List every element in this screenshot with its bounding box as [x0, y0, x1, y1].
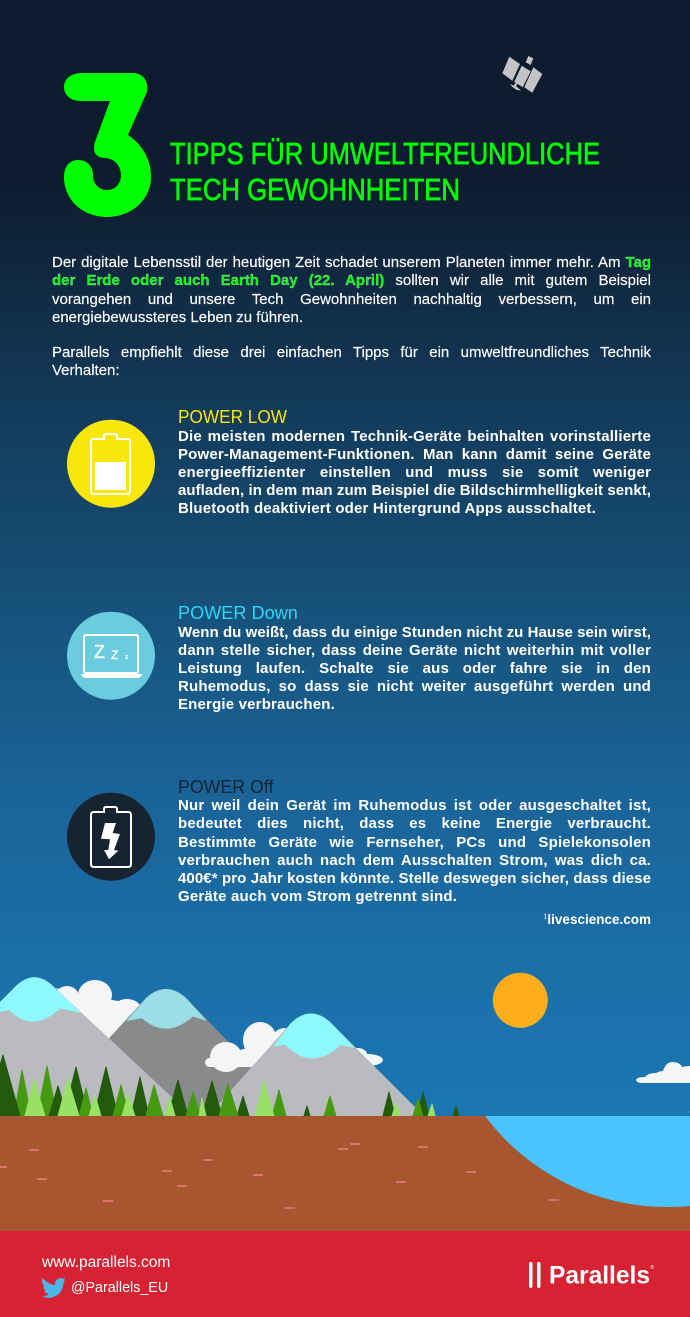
panel: power off [178, 776, 651, 927]
Parallels logo: ® [650, 1264, 654, 1271]
footer twitter handle: @Parallels_EU [71, 1280, 168, 1296]
text: power off: Bestimmte Geräte wie Fernseher, PCs und Spielekonsolen [178, 834, 651, 851]
text: power low: Die meisten modernen Technik-Geräte beinhalten vorinstallierte [178, 428, 651, 445]
icon: sun [493, 973, 548, 1028]
panel: power down [178, 602, 651, 713]
text: power off: verbrauchen auch nach dem Ausschalten Strom, was dich ca. [178, 852, 651, 869]
heading: power low: POWER LOW [178, 406, 287, 427]
icon: power down laptop: Z [94, 642, 105, 662]
intro text: energiebewussteres Leben zu führen. [52, 309, 303, 326]
horizon dots [465, 1111, 690, 1113]
numeral 3 [64, 73, 151, 217]
title [170, 137, 600, 207]
cloud right [636, 1062, 690, 1083]
text: power low: energieeffizienter einstellen und muss sie somit weniger [178, 464, 651, 481]
ground [0, 1116, 690, 1231]
heading: power down: POWER Down [178, 602, 298, 623]
sea [485, 1116, 690, 1207]
cloud in front of dark mountain [205, 1022, 383, 1072]
mountain: left light gray [0, 977, 192, 1116]
text: power low [178, 428, 651, 517]
intro text: vorangehen und unsere Tech Gewohnheiten nachhaltig verbessern, um ein [52, 291, 651, 308]
intro text [52, 254, 652, 379]
panel: power low [178, 406, 651, 517]
text: power off: 400€* pro Jahr kosten könnte. Stelle deswegen sicher, dass diese [178, 870, 651, 887]
cloud behind mountains [55, 980, 145, 1045]
title: TIPPS FÜR UMWELTFREUNDLICHE [170, 137, 600, 171]
icon: power down laptop: Z [111, 648, 118, 662]
icon: power down laptop: z [125, 654, 129, 661]
icon: power down laptop [67, 612, 155, 700]
text: power down: Wenn du weißt, dass du einige Stunden nicht zu Hause sein wirst, [178, 624, 651, 641]
text: power low: Bluetooth deaktiviert oder Hintergrund Apps ausschaltet. [178, 500, 596, 517]
intro text: Parallels empfiehlt diese drei einfachen Tipps für ein umweltfreundliches Technik [52, 344, 651, 361]
icon: power off battery [67, 793, 155, 881]
mountain: right light gray [208, 1014, 424, 1116]
heading: power off: POWER Off [178, 776, 273, 797]
text: power down: Leistung laufen. Schalte sie aus oder fahre sie in den [178, 660, 651, 677]
trees [0, 1055, 459, 1116]
Parallels logo: Parallels [549, 1262, 650, 1290]
source note: 1livescience.com [544, 912, 651, 927]
text: power down [178, 624, 651, 713]
text: power down: Energie verbrauchen. [178, 696, 335, 713]
text: power off [178, 797, 651, 905]
text: power low: Power-Management-Funktionen. Man kann damit seine Geräte [178, 446, 651, 463]
text: power low: aufladen, in dem man zum Beispiel die Bildschirmhelligkeit senkt, [178, 482, 651, 499]
text: power down: dann stelle sicher, dass deine Geräte nicht weiterhin mit voller [178, 642, 651, 659]
text: power off: bedeutet dies nicht, dass es keine Energie verbraucht. [178, 815, 651, 832]
mountain: dark gray [100, 989, 300, 1116]
icon: power low battery [67, 420, 155, 508]
text: power off: Nur weil dein Gerät im Ruhemodus ist oder ausgeschaltet ist, [178, 797, 651, 814]
title: TECH GEWOHNHEITEN [170, 173, 460, 207]
intro text: Verhalten: [52, 362, 120, 379]
text: power down: Ruhemodus, so dass sie nicht weiter ausgeführt werden und [178, 678, 651, 695]
footer band [0, 1231, 690, 1317]
text: power off: Geräte auch vom Strom getrennt sind. [178, 888, 457, 905]
icon: twitter bird [42, 1277, 65, 1298]
intro text: der Erde oder auch Earth Day (22. April) sollten wir alle mit gutem Beispiel [52, 272, 651, 289]
grass ticks on the ground [0, 1143, 559, 1209]
intro text: Der digitale Lebensstil der heutigen Zeit schadet unserem Planeten immer mehr. Am Tag [52, 254, 651, 271]
footer website: www.parallels.com [42, 1254, 170, 1271]
icon: satellite [502, 56, 542, 93]
